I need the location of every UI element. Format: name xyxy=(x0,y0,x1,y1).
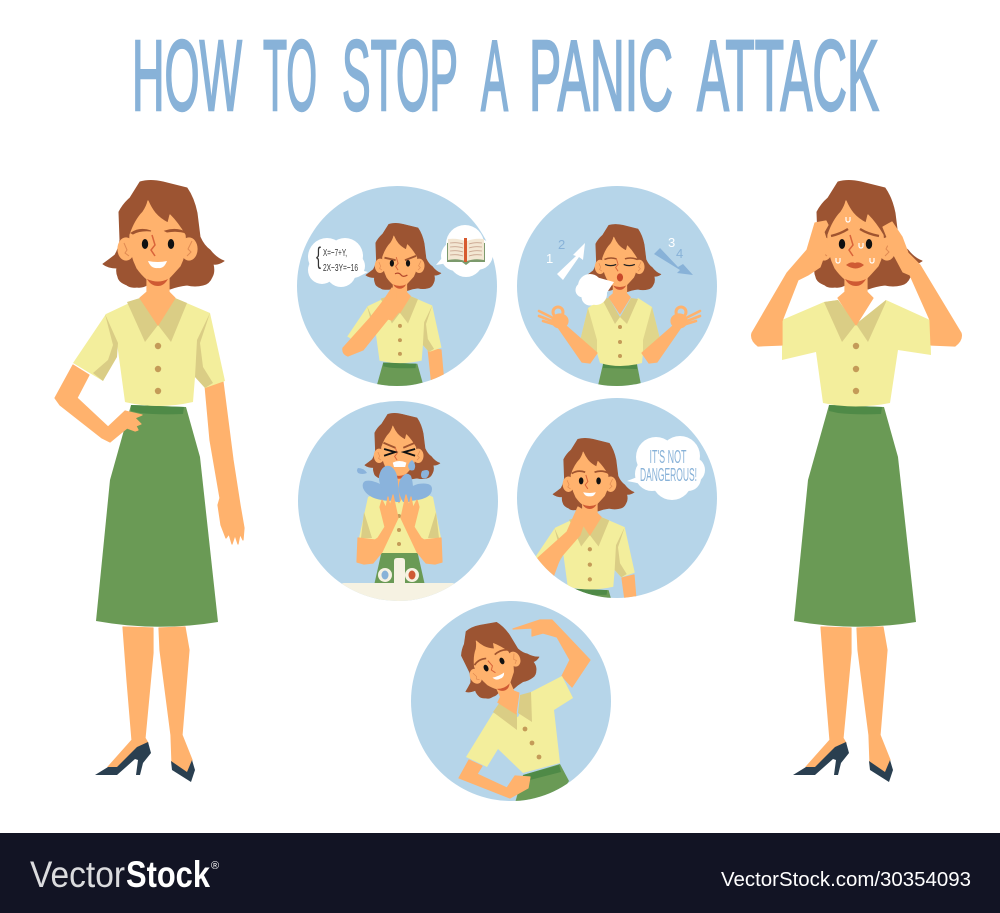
panel: stretching xyxy=(411,601,611,803)
arrow: exhale xyxy=(654,248,693,275)
hands and arms xyxy=(357,495,398,564)
figure: woman splashing water xyxy=(340,413,456,607)
registered mark: ® xyxy=(211,860,219,872)
panel: breathing exercise xyxy=(517,186,717,390)
footer bar xyxy=(0,833,1000,913)
speech bubble: IT'S NOT xyxy=(650,447,687,467)
title: PANIC xyxy=(529,20,673,132)
panel: reassuring self-talk xyxy=(517,398,717,598)
panel: cold water on face xyxy=(298,401,498,607)
character: panicking woman xyxy=(752,180,961,782)
arrow: inhale xyxy=(557,243,585,280)
figure: reassuring woman xyxy=(536,438,636,598)
circle background xyxy=(298,401,498,601)
arms and mudra hands xyxy=(539,307,700,363)
panel: distract the mind xyxy=(297,186,497,386)
character: calm smiling woman xyxy=(55,180,244,782)
right arm to head xyxy=(883,222,961,346)
circle background xyxy=(297,186,497,386)
title: A xyxy=(481,20,508,132)
count numbers: 2 xyxy=(558,237,565,252)
thought bubble: equation: 2X−3Y=−16 xyxy=(323,262,358,274)
thought bubble: equation xyxy=(308,238,368,287)
speech bubble xyxy=(627,436,705,500)
figure: breathing woman xyxy=(579,224,661,390)
image id: VectorStock.com/30354093 xyxy=(721,869,971,891)
circle background xyxy=(517,186,717,386)
figure: stretching woman xyxy=(458,619,591,801)
VectorStock logo: Vector xyxy=(30,854,125,895)
count numbers: 1 xyxy=(546,251,553,266)
circle background xyxy=(517,398,717,598)
sink and faucet xyxy=(342,583,454,601)
count numbers: 3 xyxy=(668,235,675,250)
title xyxy=(132,20,879,132)
title: HOW xyxy=(132,20,242,132)
title: STOP xyxy=(342,20,458,132)
thought bubble: equation: X=−7+Y, xyxy=(323,247,347,259)
breath cloud xyxy=(576,274,614,306)
count numbers: 4 xyxy=(676,246,683,261)
title: TO xyxy=(263,20,317,132)
count numbers xyxy=(546,235,683,266)
water splash xyxy=(357,460,432,502)
thought bubble: open book xyxy=(436,225,493,277)
figure: thinking woman xyxy=(342,223,444,386)
speech bubble: DANGEROUS! xyxy=(640,465,697,485)
circle background xyxy=(411,601,611,801)
thought bubble: equation: { xyxy=(316,243,321,270)
left arm to head xyxy=(752,221,828,346)
VectorStock logo: Stock xyxy=(126,854,210,895)
